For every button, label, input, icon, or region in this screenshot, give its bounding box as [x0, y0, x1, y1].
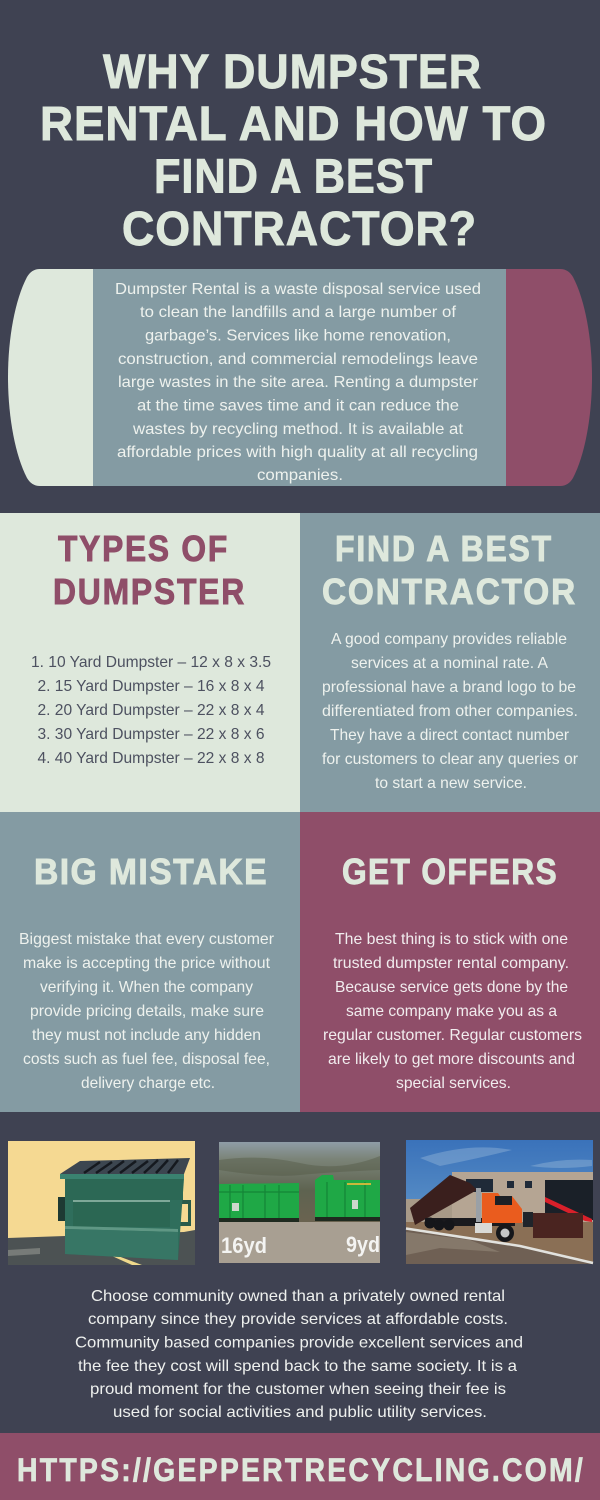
- closing text: used for social activities and public utility services.: [113, 1404, 487, 1421]
- intro text: at the time saves time and it can reduce the: [137, 398, 459, 414]
- heading: find a best contractor: [322, 528, 577, 612]
- intro text: to clean the landfills and a large number of: [140, 304, 457, 321]
- get offers text: The best thing is to stick with one: [335, 931, 568, 948]
- 16yd green dumpster: [219, 1183, 299, 1218]
- closing text: proud moment for the customer when seeing their fee is: [90, 1381, 506, 1398]
- get offers text: are likely to get more discounts and: [328, 1051, 575, 1068]
- contractor text: [322, 631, 579, 792]
- contractor text: for customers to clear any queries or: [322, 751, 579, 768]
- big mistake text: [19, 931, 275, 1092]
- heading: types of dumpster: [53, 528, 246, 612]
- get offers text: regular customer. Regular customers: [323, 1027, 582, 1044]
- list of dumpster sizes: 2. 20 Yard Dumpster – 22 x 8 x 4: [38, 702, 265, 719]
- truck wheels: [496, 1224, 514, 1242]
- closing text: [75, 1288, 523, 1421]
- building: [452, 1172, 593, 1222]
- big mistake text: delivery charge etc.: [81, 1075, 215, 1092]
- list of dumpster sizes: 2. 15 Yard Dumpster – 16 x 8 x 4: [38, 678, 265, 695]
- big mistake text: provide pricing details, make sure: [30, 1003, 264, 1020]
- intro right cap: [506, 269, 592, 486]
- raised container: [410, 1175, 477, 1225]
- 9yd green dumpster: [315, 1175, 380, 1217]
- list of dumpster sizes: 4. 40 Yard Dumpster – 22 x 8 x 8: [38, 750, 265, 767]
- list of dumpster sizes: 3. 30 Yard Dumpster – 22 x 8 x 6: [38, 726, 265, 743]
- big mistake text: Biggest mistake that every customer: [19, 931, 275, 948]
- heading: find a best contractor: CONTRACTOR: [322, 571, 577, 612]
- intro text: [115, 281, 481, 484]
- intro text: companies.: [257, 467, 343, 484]
- contractor text: professional have a brand logo to be: [322, 679, 576, 696]
- contractor text: services at a nominal rate. A: [351, 655, 548, 672]
- intro text: wastes by recycling method. It is available at: [132, 421, 464, 438]
- panel: find a best contractor: [300, 513, 600, 812]
- intro text: large wastes in the site area. Renting a dumpster: [118, 374, 479, 391]
- title: [40, 46, 547, 256]
- size labels: 16yd: [221, 1233, 267, 1258]
- contractor text: They have a direct contact number: [330, 727, 570, 744]
- intro text: Dumpster Rental is a waste disposal service used: [115, 281, 481, 298]
- big mistake text: they must not include any hidden: [32, 1027, 261, 1044]
- panel: get offers: [300, 812, 600, 1112]
- closing text: company since they provide services at affordable costs.: [88, 1311, 508, 1328]
- title: FIND A BEST: [154, 150, 433, 204]
- title: CONTRACTOR?: [122, 203, 477, 256]
- intro center block: [93, 269, 506, 486]
- get offers text: same company make you as a: [346, 1003, 557, 1020]
- closing text: Community based companies provide excellent services and: [75, 1334, 523, 1352]
- closing text: the fee they cost will spend back to the same society. It is a: [78, 1358, 517, 1375]
- contractor text: differentiated from other companies.: [322, 703, 578, 720]
- contractor text: to start a new service.: [375, 775, 527, 792]
- get offers text: [323, 931, 582, 1092]
- intro text: garbage’s. Services like home renovation,: [145, 328, 451, 344]
- intro text: affordable prices with high quality at all recycling: [117, 444, 478, 461]
- url banner: [0, 1433, 600, 1500]
- panel: intro: [8, 269, 592, 486]
- get offers text: special services.: [396, 1075, 511, 1092]
- big mistake text: verifying it. When the company: [40, 979, 253, 996]
- panel: big mistake: [0, 812, 300, 1112]
- closing text: Choose community owned than a privately owned rental: [91, 1288, 505, 1305]
- heading: find a best contractor: FIND A BEST: [335, 528, 553, 569]
- intro left cap: [8, 269, 93, 486]
- panel: types of dumpster: [0, 513, 300, 812]
- big mistake text: make is accepting the price without: [23, 955, 271, 972]
- heading: types of dumpster: DUMPSTER: [53, 571, 246, 612]
- photo: green dumpster against wall: [8, 1141, 195, 1265]
- title: WHY DUMPSTER: [103, 46, 482, 99]
- photo: 16yd and 9yd dumpsters: 9yd: [346, 1232, 380, 1257]
- list of dumpster sizes: [31, 654, 271, 767]
- photo: 16yd and 9yd dumpsters: [219, 1142, 380, 1263]
- heading: types of dumpster: TYPES OF: [58, 528, 229, 569]
- roll-off container on ground: [533, 1213, 583, 1238]
- get offers text: Because service gets done by the: [335, 979, 568, 996]
- ground: [406, 1222, 593, 1264]
- contractor text: A good company provides reliable: [331, 631, 567, 648]
- intro text: construction, and commercial remodelings leave: [118, 351, 478, 368]
- big mistake text: costs such as fuel fee, disposal fee,: [23, 1051, 270, 1068]
- list of dumpster sizes: 1. 10 Yard Dumpster – 12 x 8 x 3.5: [31, 654, 271, 671]
- photo: orange roll-off truck: [406, 1140, 593, 1264]
- truck cab: [482, 1193, 522, 1223]
- get offers text: trusted dumpster rental company.: [333, 955, 569, 972]
- truck chassis: [425, 1218, 515, 1226]
- title: RENTAL AND HOW TO: [40, 98, 547, 151]
- heading: big mistake: BIG MISTAKE: [34, 851, 268, 892]
- heading: get offers: GET OFFERS: [342, 851, 558, 892]
